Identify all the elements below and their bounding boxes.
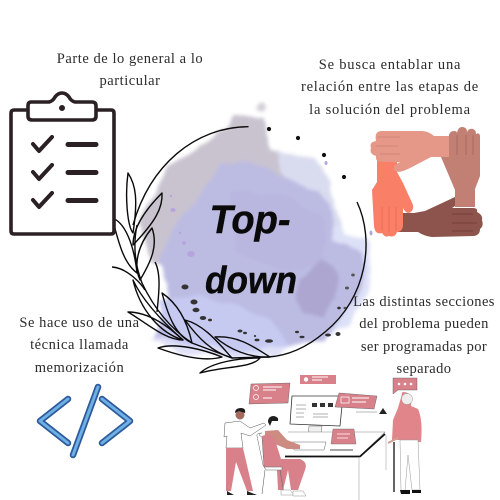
text: relación entre etapas: Se busca entablar una	[319, 57, 461, 73]
text: secciones por separado: ser programadas por	[361, 339, 487, 355]
keyboard	[292, 442, 326, 450]
icon: clipboard checklist	[11, 93, 114, 234]
floating card left	[249, 383, 290, 404]
monitor	[290, 396, 343, 436]
person seated	[257, 416, 306, 496]
floating card envelope	[335, 393, 377, 409]
laurel branch	[112, 173, 270, 373]
warning path	[356, 408, 387, 414]
icon: code brackets	[40, 387, 130, 455]
text: relación entre etapas: relación entre las etapas de	[301, 79, 479, 95]
ink dots	[182, 127, 355, 343]
text: relación entre etapas	[301, 57, 479, 118]
desk	[285, 432, 386, 500]
hand: light upper arm	[371, 131, 449, 172]
text: relación entre etapas: la solución del problema	[309, 102, 471, 118]
title: Top-down: Top-	[210, 198, 290, 242]
title: Top-down	[205, 198, 297, 302]
watercolor blot	[140, 102, 370, 358]
hand: tan right arm	[441, 127, 480, 207]
title: Top-down: down	[205, 260, 297, 302]
hand: coral left arm	[372, 160, 413, 237]
text: general a particular: Parte de lo general a lo	[57, 51, 203, 67]
text: general a particular: particular	[99, 73, 161, 89]
hand: dark lower arm	[395, 197, 483, 237]
floating card top	[300, 375, 336, 384]
person standing right	[388, 392, 422, 494]
circle outline	[133, 127, 366, 357]
icon: four linked hands	[371, 127, 483, 237]
speech bubble	[393, 378, 417, 394]
illustration: team at computer	[224, 375, 422, 500]
text: memorización: Se hace uso de una	[19, 315, 140, 331]
text: memorización	[19, 315, 140, 376]
text: secciones por separado	[353, 294, 495, 377]
text: memorización: técnica llamada	[30, 337, 129, 353]
purple specks	[170, 161, 372, 257]
text: secciones por separado: del problema pueden	[359, 316, 489, 332]
tablet	[330, 429, 356, 450]
text: memorización: memorización	[35, 360, 124, 376]
person standing left	[224, 408, 266, 495]
text: secciones por separado: separado	[397, 361, 451, 377]
text: general a particular	[57, 51, 203, 89]
text: secciones por separado: Las distintas secciones	[353, 294, 495, 310]
